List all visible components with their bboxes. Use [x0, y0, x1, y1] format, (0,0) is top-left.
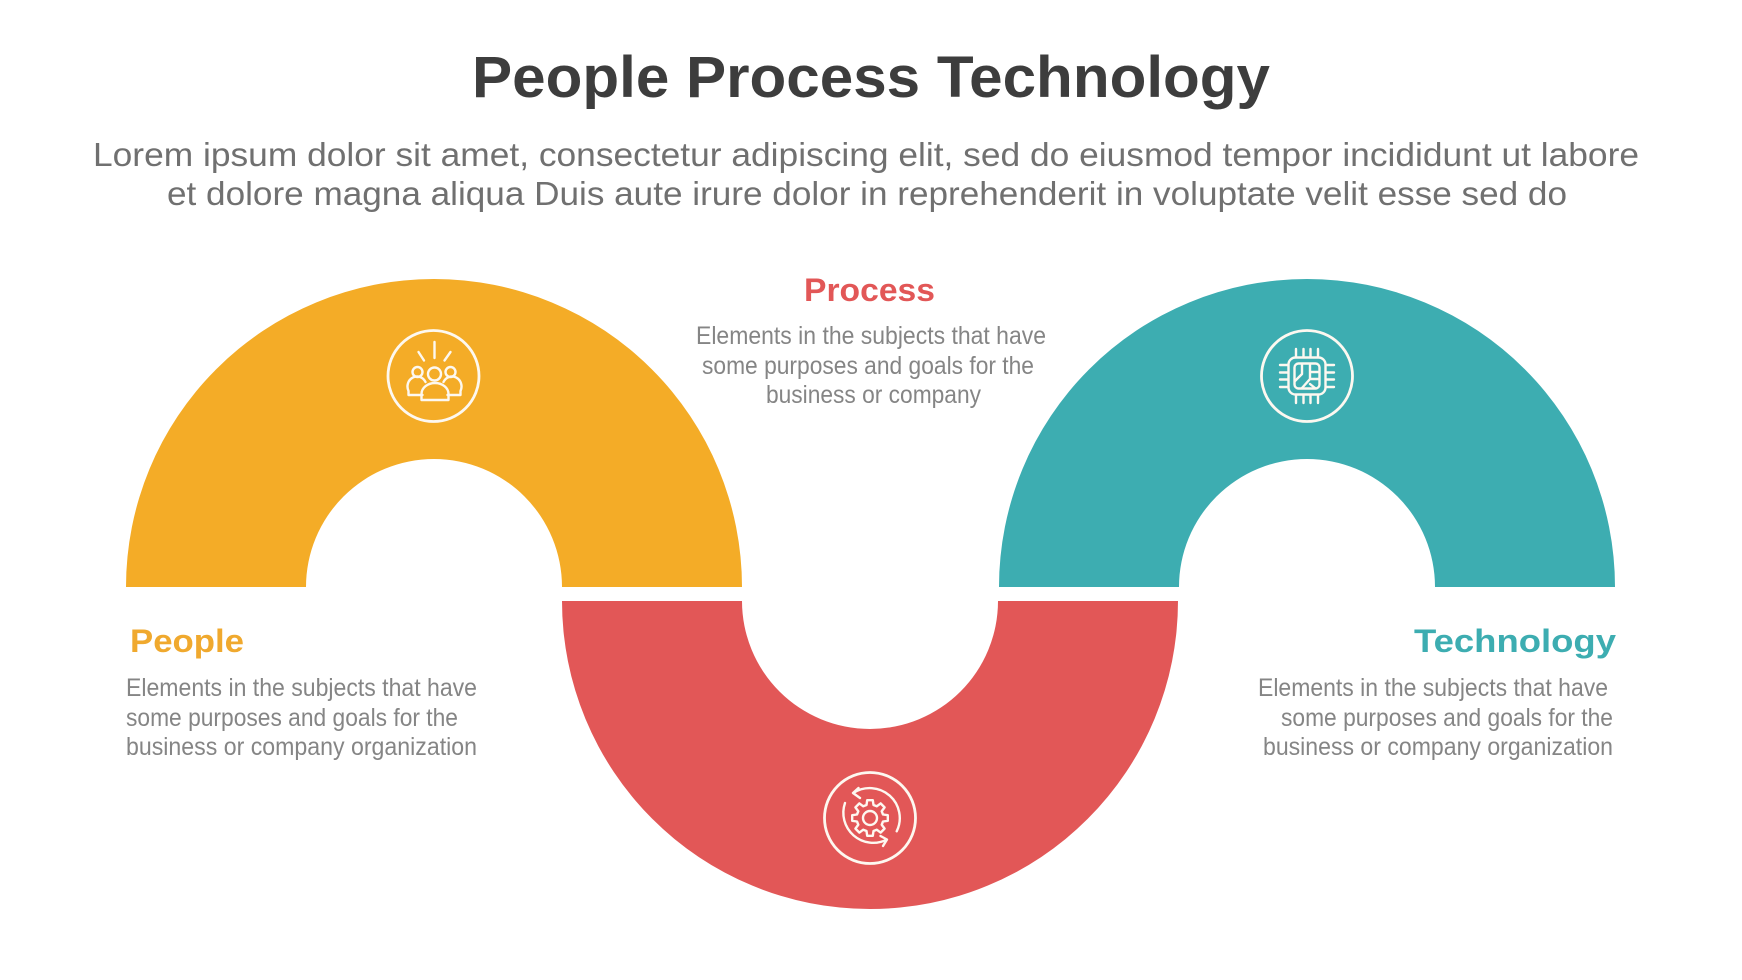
process description: business or company	[766, 381, 981, 409]
panel: technology arch	[999, 279, 1615, 587]
title: People Process Technology	[472, 45, 1270, 110]
subtitle text block: et dolore magna aliqua Duis aute irure dolor in reprehenderit in voluptate velit esse sed do	[167, 175, 1567, 212]
subtitle text block: Lorem ipsum dolor sit amet, consectetur adipiscing elit, sed do eiusmod tempor incididunt ut labore	[93, 136, 1639, 173]
process description: some purposes and goals for the	[702, 352, 1034, 380]
panel: people arch	[126, 279, 742, 587]
people description: some purposes and goals for the	[126, 704, 458, 732]
icon: process gear	[824, 772, 916, 864]
people description: business or company organization	[126, 733, 477, 761]
people description	[126, 674, 477, 761]
people label	[126, 623, 477, 761]
process description	[696, 322, 1046, 409]
technology label	[1258, 623, 1616, 761]
technology description: Elements in the subjects that have	[1258, 674, 1608, 702]
subtitle text block	[93, 136, 1639, 212]
process heading: Process	[804, 272, 935, 308]
technology description: business or company organization	[1263, 733, 1613, 761]
technology description	[1258, 674, 1613, 761]
icon: technology chip	[1262, 330, 1352, 422]
people description: Elements in the subjects that have	[126, 674, 477, 702]
people heading: People	[130, 623, 244, 659]
icon: people	[388, 330, 479, 422]
process description: Elements in the subjects that have	[696, 322, 1046, 350]
process label	[696, 272, 1046, 409]
panel: process arch	[562, 601, 1178, 909]
technology description: some purposes and goals for the	[1281, 704, 1613, 732]
technology heading: Technology	[1414, 623, 1616, 659]
